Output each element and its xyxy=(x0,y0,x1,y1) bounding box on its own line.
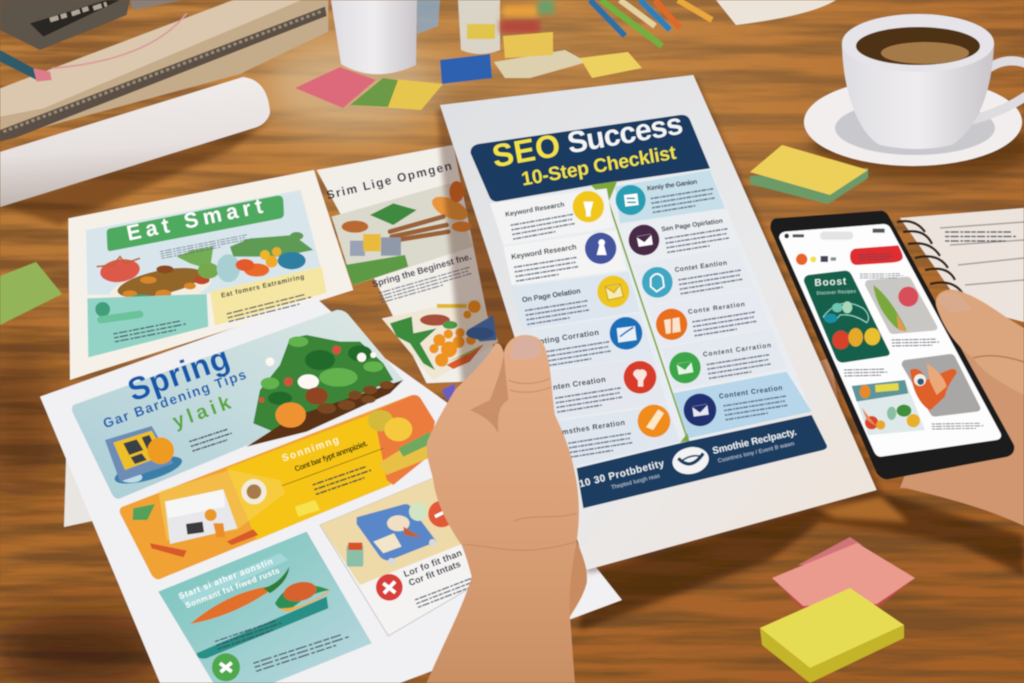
white panel with suitcase xyxy=(320,477,507,636)
coffee cup on saucer xyxy=(804,14,1024,178)
right step 6: Content Creation xyxy=(673,372,812,438)
title: Spring: Spring xyxy=(123,339,234,408)
text: Discover: Discover Recipes xyxy=(816,289,857,296)
icon: green circle xyxy=(212,653,240,681)
footer text: Smothie Reclpacty: Smothie Reclpacty. xyxy=(712,427,798,457)
image panel: oranges and ferns xyxy=(382,298,498,399)
pencils top right xyxy=(590,0,712,46)
right step 5: Content Carration xyxy=(662,328,787,390)
right step 3: Contet Eantion xyxy=(633,247,753,305)
left step 3: On Page Oelation xyxy=(512,272,640,330)
hand holding the central sheet xyxy=(427,335,587,683)
label: ylaik: ylaik xyxy=(170,392,235,433)
yellow tips panel xyxy=(210,267,327,326)
text: Cor fit tntats: Cor fit tntats xyxy=(407,559,462,588)
heading: Srim Lige Opmgen: Srim Lige Opmgen xyxy=(325,159,453,202)
infographic sheet: Spring Gardening Tips xyxy=(40,298,622,683)
left step 3: On Page Oelation: On Page Oelation xyxy=(521,286,582,304)
subtitle: 10-Step Checklist: 10-Step Checklist xyxy=(520,143,678,191)
left step 4: Ranting Corration xyxy=(523,313,653,370)
green card: Boost xyxy=(804,271,890,363)
icon: smile logo xyxy=(670,444,711,477)
icon: tablet with orange xyxy=(105,426,185,489)
teal panel with carrot xyxy=(158,532,372,683)
icon: carrot xyxy=(190,567,289,624)
right step 2: Sen Page Opirlation: Sen Page Opirlation xyxy=(661,218,723,233)
icon: red x xyxy=(376,574,403,601)
right step 6: Content Creation: Content Creation xyxy=(719,385,783,401)
left step 1: Keyword Research xyxy=(490,188,614,245)
right step 4: Conte Reration xyxy=(648,288,770,347)
footer small text: Coontnes Iony / Event B wawn xyxy=(717,441,795,465)
red button xyxy=(850,245,903,265)
right step 1: Keniy the Ganion: Keniy the Ganion xyxy=(647,179,698,193)
left step 1: Keyword Research: Keyword Research xyxy=(505,201,565,219)
right step 1: Keniy the Ganion xyxy=(615,170,725,223)
image panel: carrots and pots xyxy=(332,181,473,285)
right step 3: Contet Eantion: Contet Eantion xyxy=(674,260,727,274)
yellow tips panel: Eat fomers Eatramiring xyxy=(221,274,305,300)
yellow sticky note pad bottom right xyxy=(760,588,904,683)
green sticky note left xyxy=(0,262,62,325)
rolled white paper xyxy=(0,77,270,207)
right step 2: Sen Page Opirlation xyxy=(620,210,737,263)
blue panel with title xyxy=(72,310,403,499)
food panel xyxy=(86,190,321,314)
hand holding the phone xyxy=(815,328,1024,526)
right step 5: Content Carration: Content Carration xyxy=(703,342,772,359)
left step 2: Keyword Research: Keyword Research xyxy=(511,242,578,261)
green title banner xyxy=(107,194,284,251)
title: Eat Smart: Eat Smart xyxy=(124,194,265,246)
icon: blue suitcase xyxy=(347,502,437,567)
icon: white box xyxy=(133,470,320,557)
text: Boost: Boost xyxy=(814,276,847,289)
left step 2: Keyword Research xyxy=(503,230,627,285)
smartphone xyxy=(770,211,1014,479)
image card: vegetables xyxy=(865,277,937,334)
garden illustration xyxy=(247,335,403,447)
spiral notebooks and keyboard top left xyxy=(0,0,328,142)
heading: Spring the Beginest: Spring the Beginest fne. xyxy=(371,251,473,289)
purple tab on sheet xyxy=(442,383,455,399)
header arrow and timeline spine xyxy=(591,181,688,442)
text: Start si ather aonstin: Start si ather aonstin xyxy=(177,556,274,601)
status bar xyxy=(784,229,885,240)
title: SEO: SEO xyxy=(489,127,563,174)
orange and yellow band xyxy=(120,395,435,579)
left step 5: Content Creation xyxy=(540,357,667,420)
thumb over the phone xyxy=(936,290,1024,395)
right step 4: Conte Reration: Conte Reration xyxy=(688,301,745,316)
text: Sonmant fst fiwed rusts: Sonmant fst fiwed rusts xyxy=(184,566,281,610)
app icons row xyxy=(796,254,836,265)
glue bottle and colourful supplies xyxy=(458,0,554,54)
header banner xyxy=(471,107,710,202)
footer text: 10 30 Protbbetity: 10 30 Protbbetity xyxy=(578,458,666,490)
spiral notebook right xyxy=(897,208,1024,322)
infographic sheet: Eat Smart xyxy=(68,170,353,380)
bottom sheet peeking out xyxy=(64,395,100,527)
yellow sticky note pad xyxy=(750,145,868,204)
left step 4: Ranting Corration: nting Corration xyxy=(539,328,600,346)
title: Success: Success xyxy=(565,107,685,160)
pink sticky note xyxy=(772,537,915,610)
central infographic: SEO Success checklist xyxy=(437,75,883,573)
text: Cont bar fypt anmpiziet: Cont bar fypt anmpiziet. xyxy=(293,439,369,474)
footer small text: Thepted Iuogh reas xyxy=(611,473,661,491)
text: Sonnimng: Sonnimng xyxy=(281,435,340,464)
mug top xyxy=(331,0,440,74)
white paper at top right xyxy=(716,0,836,25)
left step 6: Smoothies Reration: Imsthes Reration xyxy=(559,418,626,437)
teal tips panel xyxy=(87,294,208,357)
icon: red badge xyxy=(428,501,455,527)
text: Lor fo fit than: Lor fo fit than xyxy=(402,548,463,579)
left step 5: Content Creation: nten Creation xyxy=(552,375,607,392)
image card: food collage xyxy=(852,380,925,435)
sticky notes top center xyxy=(295,32,642,110)
left step 6: Smoothies Reration xyxy=(555,405,680,467)
infographic sheet: Srim Lige xyxy=(317,145,500,383)
icon: taco xyxy=(275,579,330,612)
subtitle: Gar Bardening Tips: Gar Bardening Tips xyxy=(101,367,248,431)
image card: orange character xyxy=(902,354,980,417)
footer banner xyxy=(577,415,827,508)
